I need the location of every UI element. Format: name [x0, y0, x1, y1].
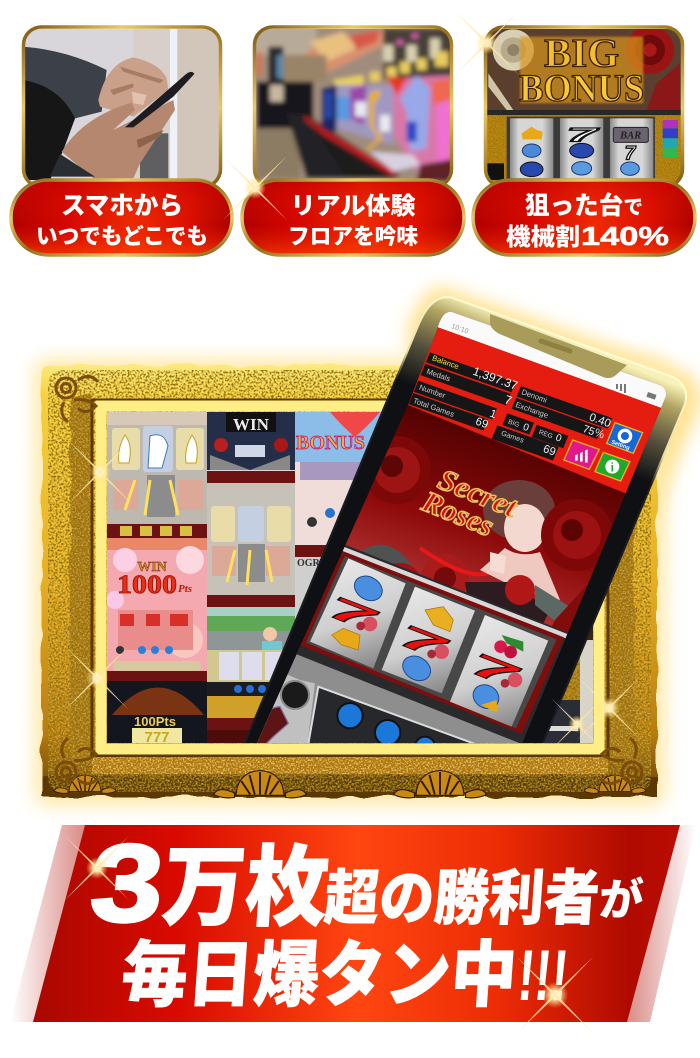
- column 3: [295, 412, 382, 617]
- smartphone: [240, 297, 686, 757]
- photo: hands holding smartphone: [23, 28, 223, 188]
- gold leaf texture: [48, 370, 651, 792]
- reel symbols: 7: [394, 617, 453, 668]
- card: real floor: [242, 25, 464, 255]
- card: smartphone: [11, 27, 232, 255]
- slot machine image: 7: [625, 143, 637, 164]
- headline line 1: 超の勝利者: [322, 850, 603, 937]
- slot machine image: BONUS: [519, 66, 644, 110]
- game logo: Secret: [433, 463, 523, 525]
- slot machine image: BAR: [619, 131, 641, 142]
- phone notch: [490, 314, 627, 378]
- caption pill: スマホから: [61, 186, 183, 222]
- denomination panel: 75％: [581, 423, 606, 442]
- graph button: [564, 440, 599, 469]
- big and reg counters: 0: [554, 432, 563, 445]
- column 2: [207, 412, 295, 743]
- column 1: 1000: [117, 570, 177, 599]
- caption pill: [11, 180, 232, 255]
- caption pill: フロアを吟味: [288, 219, 418, 251]
- denomination panel: [512, 386, 612, 442]
- earpiece: [541, 341, 570, 351]
- sparkle: frame left lower: [65, 646, 129, 710]
- reel symbols: 7: [466, 646, 525, 696]
- game logo: Roses: [416, 485, 498, 543]
- settings button: [607, 423, 643, 453]
- card: big bonus: [473, 26, 695, 255]
- banner left fade: [10, 825, 87, 1022]
- red header: [408, 327, 667, 494]
- column 3: OGRE: [297, 558, 327, 569]
- lower moulding: [92, 757, 608, 774]
- roses and artwork: [357, 436, 613, 650]
- headline line 2: 毎日爆タン中: [119, 916, 521, 1021]
- status bar: [438, 312, 666, 408]
- denomination panel: Denomi: [520, 387, 548, 405]
- balance panel: 1: [488, 408, 498, 421]
- reel symbols: [323, 571, 525, 713]
- big and reg counters: REG: [538, 429, 554, 440]
- photo: blurred pachinko hall: [256, 29, 450, 182]
- golden picture frame: [34, 358, 666, 806]
- banner: [10, 817, 696, 1022]
- corner scrolls: [56, 376, 642, 784]
- info button: [595, 452, 630, 481]
- balance panel: 1,397.37: [471, 364, 520, 393]
- slot game collage: [106, 412, 593, 746]
- sparkle: banner top left: [65, 836, 129, 900]
- sparkle: banner bottom right: [517, 957, 593, 1033]
- banner right fade: [625, 825, 696, 1022]
- column 1: 777: [144, 729, 170, 746]
- balance panel: 7: [503, 392, 514, 408]
- reel unit: [257, 544, 568, 743]
- caption pill: いつでもどこでも: [36, 219, 208, 251]
- sparkle: big bonus corner: [455, 11, 519, 75]
- card frame: [254, 27, 452, 187]
- control panel: [257, 654, 519, 743]
- settings button: Setting: [610, 440, 631, 452]
- reel symbols: 7: [323, 589, 383, 640]
- denomination panel: 0.40: [588, 411, 612, 430]
- denomination panel: Exchange: [514, 400, 549, 420]
- right slot behind phone: [544, 626, 593, 743]
- shell ornaments: [54, 770, 646, 798]
- balance panel: Number: [418, 383, 447, 400]
- caption pill: 狙った台で: [525, 186, 643, 222]
- slot machine image: [487, 26, 687, 182]
- game data panels: [409, 352, 643, 481]
- column 1: [106, 412, 207, 746]
- balance panel: Total Games: [412, 396, 456, 419]
- phone glow: [408, 287, 700, 640]
- card frame: [24, 27, 220, 187]
- balance panel: Balance: [431, 353, 460, 371]
- phone body: [242, 297, 686, 750]
- big and reg counters: [492, 412, 569, 462]
- phone screen: [257, 312, 666, 743]
- status icons: [450, 323, 657, 400]
- headline line 1: [86, 817, 646, 945]
- caption pill: リアル体験: [290, 186, 416, 221]
- caption pill: [473, 180, 695, 255]
- slot machine image: 7: [567, 126, 600, 147]
- caption pill: 140%: [581, 221, 669, 251]
- woman: [465, 480, 568, 623]
- headline line 2: !!!: [515, 936, 572, 1016]
- column 1: WIN: [137, 560, 167, 575]
- column 1: Pts: [178, 583, 192, 595]
- big and reg counters: 69: [541, 443, 557, 459]
- balance panel: Medals: [425, 367, 452, 384]
- headline line 1: 万枚: [159, 817, 333, 944]
- sparkle: between cards: [223, 156, 287, 220]
- headline line 1: 3: [86, 822, 169, 945]
- column 2: WIN: [233, 415, 270, 434]
- big and reg counters: BIG: [507, 419, 520, 429]
- slot machine image: BIG: [544, 31, 619, 76]
- headline line 1: が: [597, 864, 646, 928]
- banner red parallelogram: [33, 825, 680, 1022]
- caption pill: [242, 180, 464, 255]
- balance panel: 69: [474, 416, 490, 431]
- sparkle: frame right: [577, 676, 641, 740]
- balance panel: [409, 352, 520, 434]
- card frame: [486, 27, 682, 187]
- info button: i: [611, 460, 614, 474]
- game logo: [418, 470, 519, 536]
- sparkle: frame left upper: [68, 440, 132, 504]
- column 1: 100Pts: [134, 714, 176, 729]
- column 3: BONUS: [296, 432, 365, 454]
- big and reg counters: Games: [500, 428, 526, 445]
- status icons: 10:10: [450, 323, 469, 336]
- big and reg counters: 0: [521, 422, 531, 434]
- caption pill: 機械割: [506, 217, 580, 252]
- sparkle: frame right inner: [551, 698, 603, 750]
